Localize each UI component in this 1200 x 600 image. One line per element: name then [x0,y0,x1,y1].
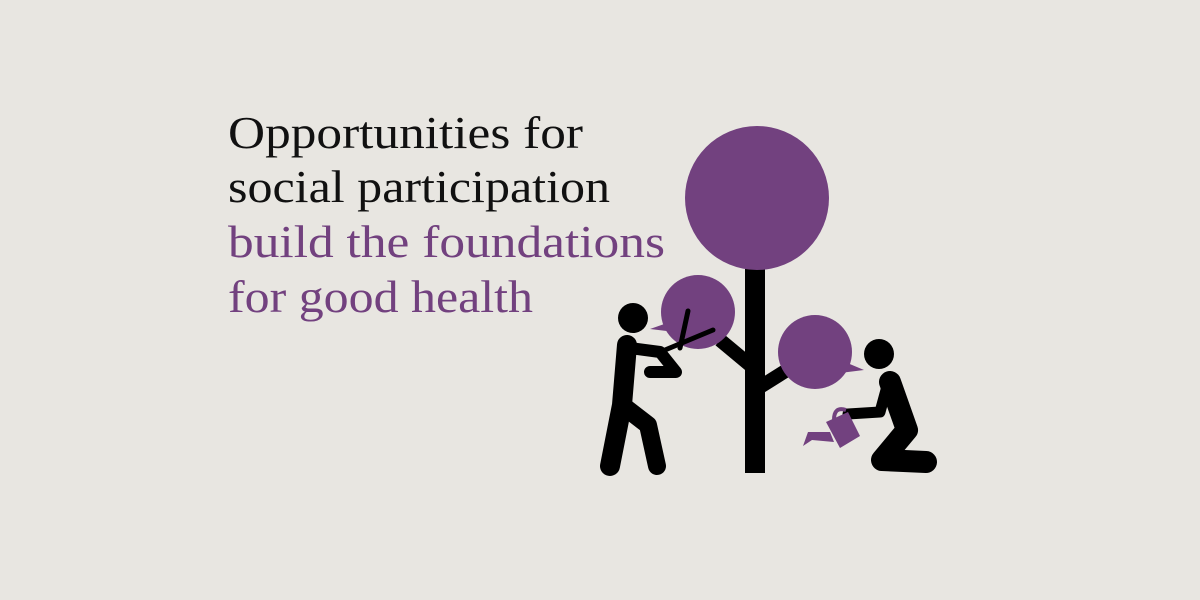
person with watering can [848,339,926,462]
person with shears [610,303,713,466]
illustration: tree with people [610,126,926,473]
title [228,107,665,322]
title: build the foundations [228,216,665,267]
title: for good health [228,271,533,322]
tree [650,126,864,473]
title: Opportunities for [228,107,583,158]
title: social participation [228,161,610,212]
icon: watering can [803,409,860,448]
